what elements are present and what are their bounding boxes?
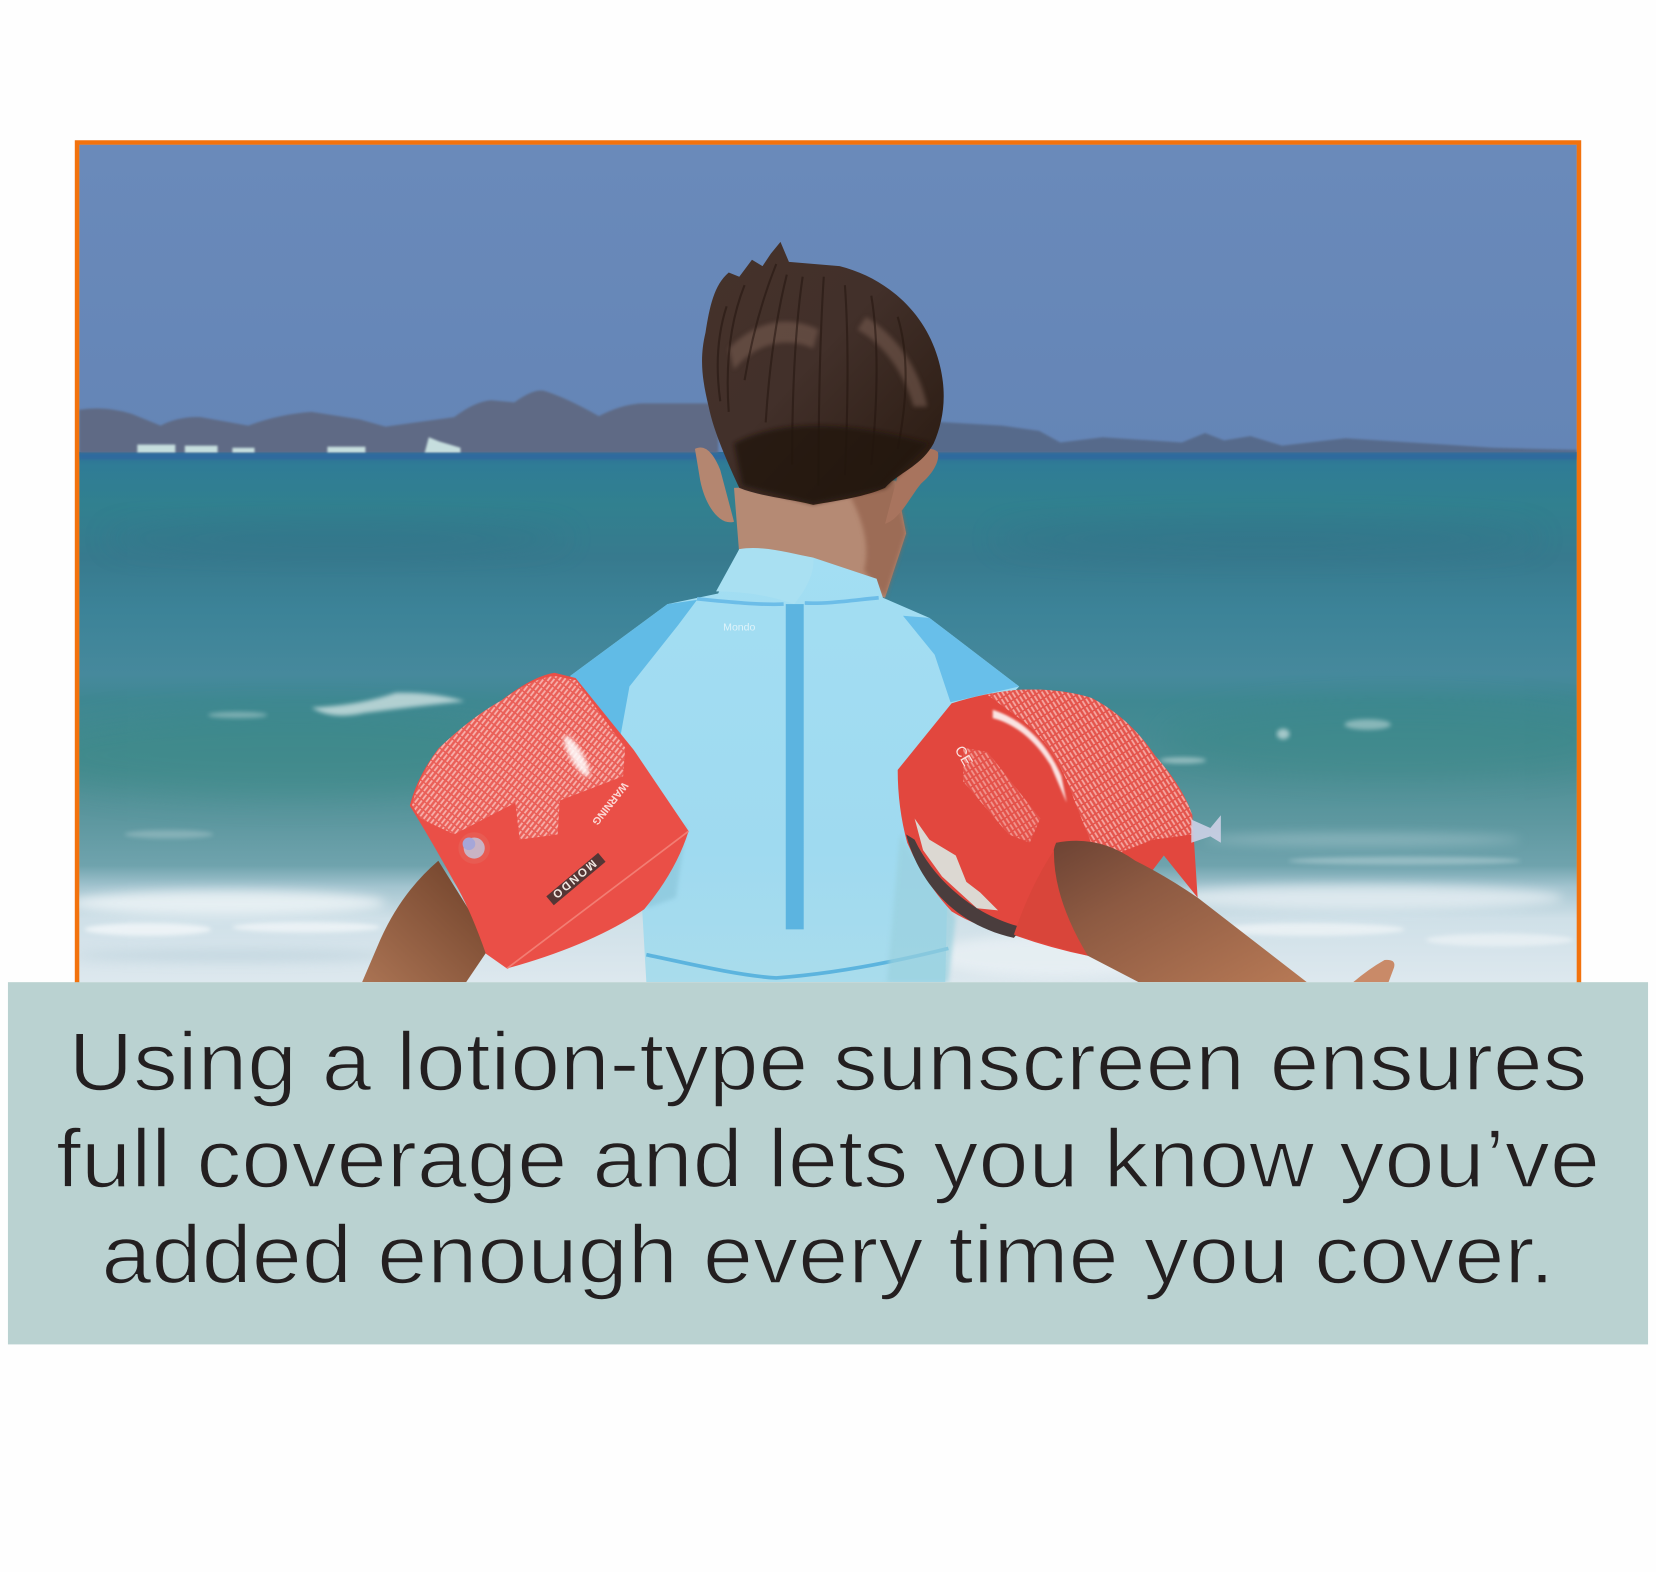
armband printed warnings xyxy=(412,676,625,840)
armband valve xyxy=(458,832,490,864)
right armband xyxy=(898,690,1394,984)
armband dark edge xyxy=(906,834,1022,938)
caption text: added enough every time you cover. xyxy=(101,1209,1555,1301)
left ear xyxy=(695,447,734,522)
neck shadow xyxy=(850,481,906,598)
sky xyxy=(79,145,1577,456)
shadow on shirt xyxy=(647,848,683,907)
child xyxy=(361,242,1394,984)
boats on the horizon xyxy=(137,437,460,453)
photo: child at the beach xyxy=(21,145,1626,984)
caption text: full coverage and lets you know you’ve xyxy=(56,1113,1600,1205)
caption text: Using a lotion-type sunscreen ensures xyxy=(69,1016,1587,1108)
rear valve xyxy=(1191,815,1221,843)
collar fold xyxy=(716,548,814,592)
water bands and waves xyxy=(21,524,1626,977)
left sleeve xyxy=(570,600,697,745)
dark water line xyxy=(79,453,1577,459)
left arm xyxy=(361,861,491,984)
armband warning label: WARNING xyxy=(589,780,630,827)
armband glare xyxy=(560,733,594,779)
neck xyxy=(734,481,906,598)
right ear xyxy=(885,449,938,524)
armband body xyxy=(410,673,689,968)
caption panel xyxy=(8,982,1648,1344)
hem seam xyxy=(646,948,948,978)
right arm xyxy=(1053,841,1310,984)
armband glare xyxy=(993,710,1067,803)
hair shadow at nape xyxy=(734,426,929,504)
orange photo frame xyxy=(77,143,1579,1019)
armband brand: MONDO xyxy=(548,857,599,902)
caption text xyxy=(56,1016,1600,1301)
inner cuff of armband xyxy=(1014,850,1088,956)
shirt logo: Mondo xyxy=(723,621,756,633)
armband CE mark: CE xyxy=(951,743,975,769)
armband body xyxy=(898,690,1198,956)
hand xyxy=(1351,960,1394,984)
left armband xyxy=(410,673,689,968)
rash guard body xyxy=(570,549,1019,982)
armband splash print xyxy=(915,818,998,910)
collar seam xyxy=(697,598,879,604)
hair highlights xyxy=(729,317,927,407)
right sleeve xyxy=(903,616,1019,702)
back zipper xyxy=(786,604,804,929)
hair xyxy=(702,242,944,505)
armband seam xyxy=(507,831,689,968)
printed warnings, lower panel xyxy=(963,748,1040,843)
hair strands xyxy=(716,264,907,430)
armband printed warnings xyxy=(987,690,1193,861)
distant islands xyxy=(79,390,1577,453)
sea xyxy=(79,452,1577,982)
panel background xyxy=(8,982,1648,1344)
